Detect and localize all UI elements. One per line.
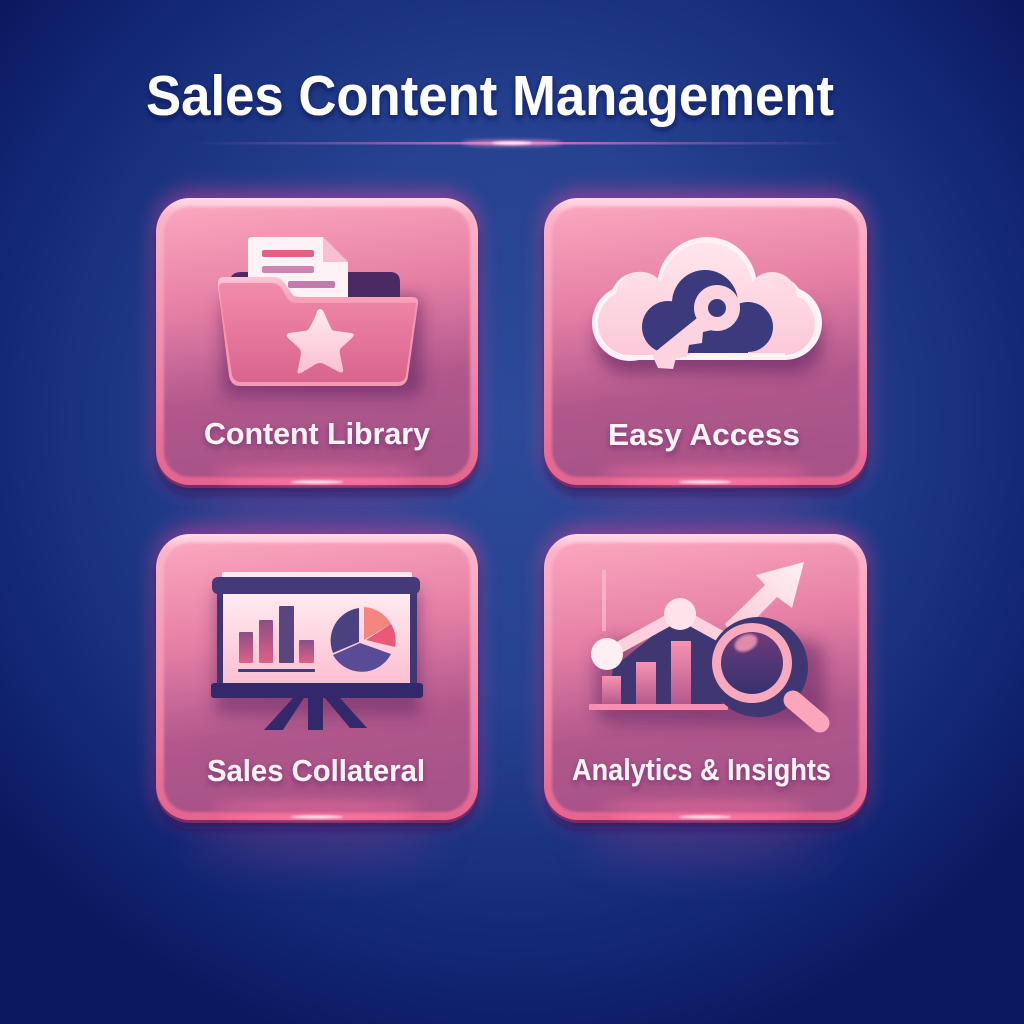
label: Content Library: [204, 416, 431, 451]
label: Sales Collateral: [207, 753, 425, 788]
panel: sales collateral: [156, 528, 478, 863]
title underline: [190, 140, 850, 146]
panel: easy access: [544, 192, 867, 527]
label: Analytics & Insights: [572, 752, 831, 787]
icon: cloud with key: [592, 237, 822, 373]
label: Easy Access: [608, 417, 800, 452]
title: Sales Content Management: [146, 64, 834, 128]
key hole: [708, 299, 726, 317]
panel: analytics and insights: [544, 528, 867, 863]
icon: chart with arrow and magnifier: [589, 562, 825, 725]
icon: presentation board with charts: [211, 572, 423, 730]
icon: folder with document and star: [218, 237, 422, 396]
panel: content library: [156, 192, 478, 527]
